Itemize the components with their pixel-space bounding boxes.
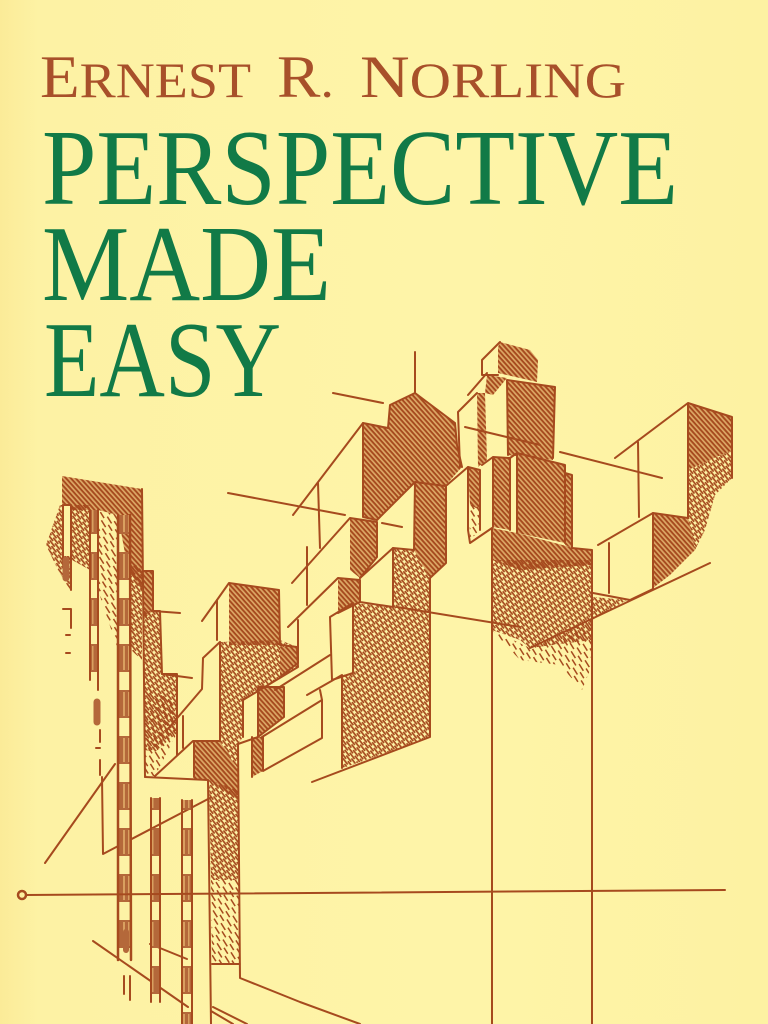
central tower outlines [447,342,662,1024]
author name: NORLING [360,44,626,110]
windows: left tower columns [63,505,192,1024]
title: Perspective Made Easy: EASY [44,301,281,420]
middle left building outlines [155,583,322,777]
title: Perspective Made Easy: PERSPECTIVE [42,109,678,228]
mid building hatching [229,583,280,645]
central tower hatching [498,342,538,382]
right wing outlines [530,403,732,648]
horizon line with vanishing point [18,890,725,899]
title: Perspective Made Easy: MADE [42,205,331,324]
right wing hatching [688,403,732,470]
title: Perspective Made Easy [42,109,678,420]
left tower hatching [62,476,142,590]
author name [40,44,626,110]
author name: ERNEST [40,44,251,110]
central buildings outlines [228,352,520,782]
center-left building hatching [363,393,462,520]
illustration: buildings in perspective [18,342,732,1024]
left tower outlines [45,489,360,1024]
shaded building faces [46,342,732,964]
author name: R. [277,44,334,110]
